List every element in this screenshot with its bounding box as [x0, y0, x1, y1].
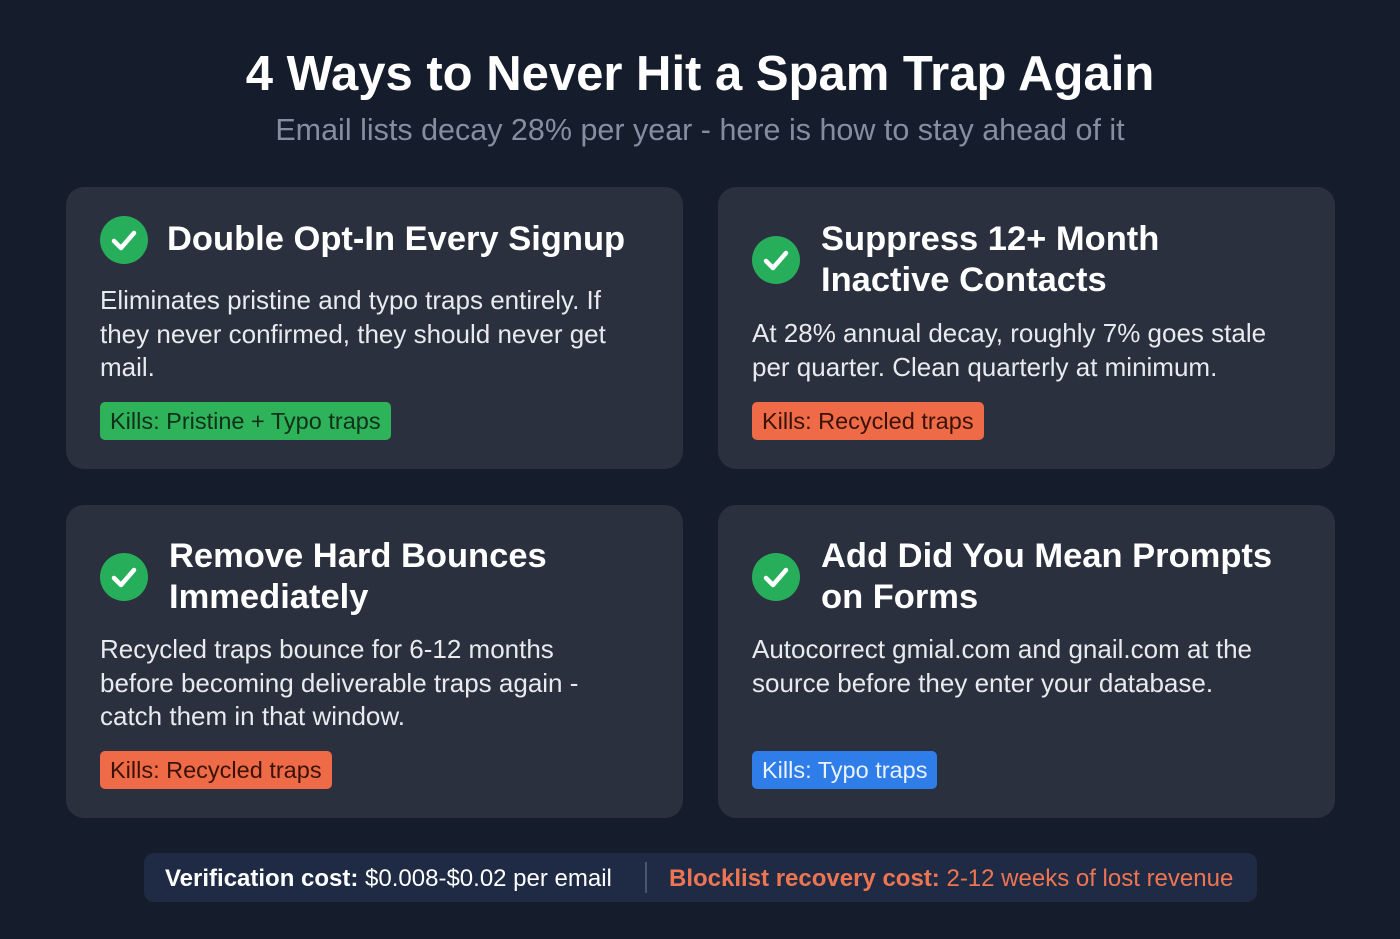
icon: check — [752, 553, 800, 601]
tag: Kills: Recycled traps — [762, 408, 974, 434]
subtitle: Email lists decay 28% per year - here is how to stay ahead of it — [275, 113, 1125, 147]
panel: did you mean — [718, 505, 1335, 818]
footer bar — [144, 853, 1257, 902]
icon: check — [100, 553, 148, 601]
heading — [821, 220, 1159, 299]
tag: Kills: Typo traps — [762, 757, 927, 783]
panel: suppress inactive — [718, 187, 1335, 469]
heading: Remove Hard Bounces — [169, 537, 547, 575]
panel: hard bounces — [66, 505, 683, 818]
heading: on Forms — [821, 578, 978, 616]
heading: Inactive Contacts — [821, 261, 1107, 299]
heading: Suppress 12+ Month — [821, 220, 1159, 258]
heading — [821, 537, 1272, 616]
tag: Kills: Pristine + Typo traps — [110, 408, 381, 434]
panel: double opt-in — [66, 187, 683, 469]
text: Recycled traps bounce for 6-12 months before becoming deliverable traps again - catch them in that window. — [100, 634, 578, 731]
icon: check — [100, 216, 148, 264]
heading — [169, 537, 547, 616]
text: At 28% annual decay, roughly 7% goes stale per quarter. Clean quarterly at minimum. — [752, 318, 1266, 382]
title: 4 Ways to Never Hit a Spam Trap Again — [246, 47, 1154, 101]
verification cost: Verification cost: $0.008-$0.02 per email — [165, 865, 612, 892]
tag — [752, 402, 984, 440]
tag: Kills: Recycled traps — [110, 757, 322, 783]
tag — [752, 751, 937, 789]
heading: Add Did You Mean Prompts — [821, 537, 1272, 575]
text: Eliminates pristine and typo traps entirely. If they never confirmed, they should never get mail. — [100, 285, 606, 382]
tag — [100, 402, 391, 440]
heading: Double Opt-In Every Signup — [167, 220, 625, 258]
text: Autocorrect gmial.com and gnail.com at the source before they enter your database. — [752, 634, 1252, 698]
blocklist cost: Blocklist recovery cost: 2-12 weeks of lost revenue — [669, 865, 1233, 892]
tag — [100, 751, 332, 789]
icon: check — [752, 236, 800, 284]
heading: Immediately — [169, 578, 368, 616]
